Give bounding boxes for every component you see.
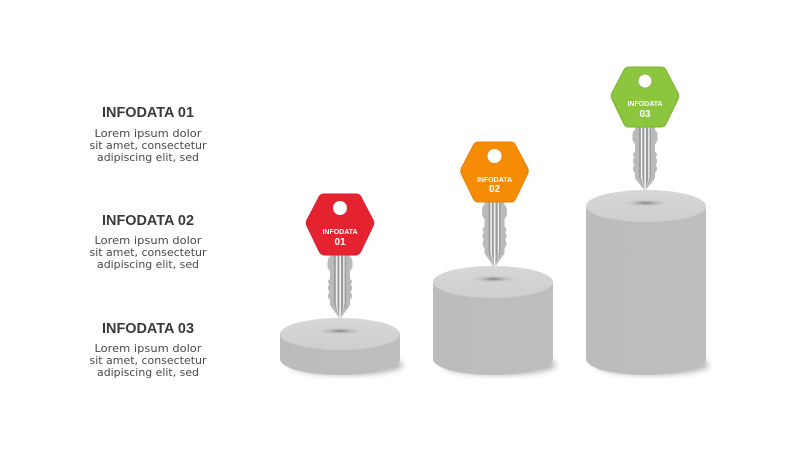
key 2: orange	[461, 142, 528, 267]
text block: infodata 02	[90, 213, 207, 271]
key 2: orange: 02	[489, 184, 500, 195]
text block: infodata 01: INFODATA 01	[102, 105, 194, 121]
key 1: red: INFODATA	[322, 229, 358, 236]
text block: infodata 03: INFODATA 03	[102, 321, 194, 337]
text block: infodata 01: adipiscing elit, sed	[97, 151, 199, 164]
text block: infodata 03: sit amet, consectetur	[90, 354, 207, 367]
key 2: orange: INFODATA	[477, 177, 512, 184]
cylinder 2	[433, 266, 556, 375]
text block: infodata 02: sit amet, consectetur	[90, 246, 207, 259]
text block: infodata 01	[90, 105, 207, 164]
text block: infodata 03: Lorem ipsum dolor	[94, 342, 202, 355]
text block: infodata 02: INFODATA 02	[102, 213, 194, 229]
cylinder 1	[280, 318, 403, 375]
text block: infodata 02: adipiscing elit, sed	[97, 258, 199, 271]
key 1: red: 01	[334, 237, 346, 248]
text block: infodata 02: Lorem ipsum dolor	[94, 234, 202, 247]
text block: infodata 03: adipiscing elit, sed	[97, 366, 199, 379]
key 3: green: 03	[639, 109, 651, 120]
text block: infodata 01: Lorem ipsum dolor	[94, 127, 202, 140]
key 3: green: INFODATA	[627, 101, 663, 108]
cylinder 3	[586, 190, 709, 375]
key 1: red	[306, 194, 374, 318]
text block: infodata 01: sit amet, consectetur	[90, 139, 207, 152]
key 3: green	[611, 67, 679, 190]
text block: infodata 03	[90, 321, 207, 379]
